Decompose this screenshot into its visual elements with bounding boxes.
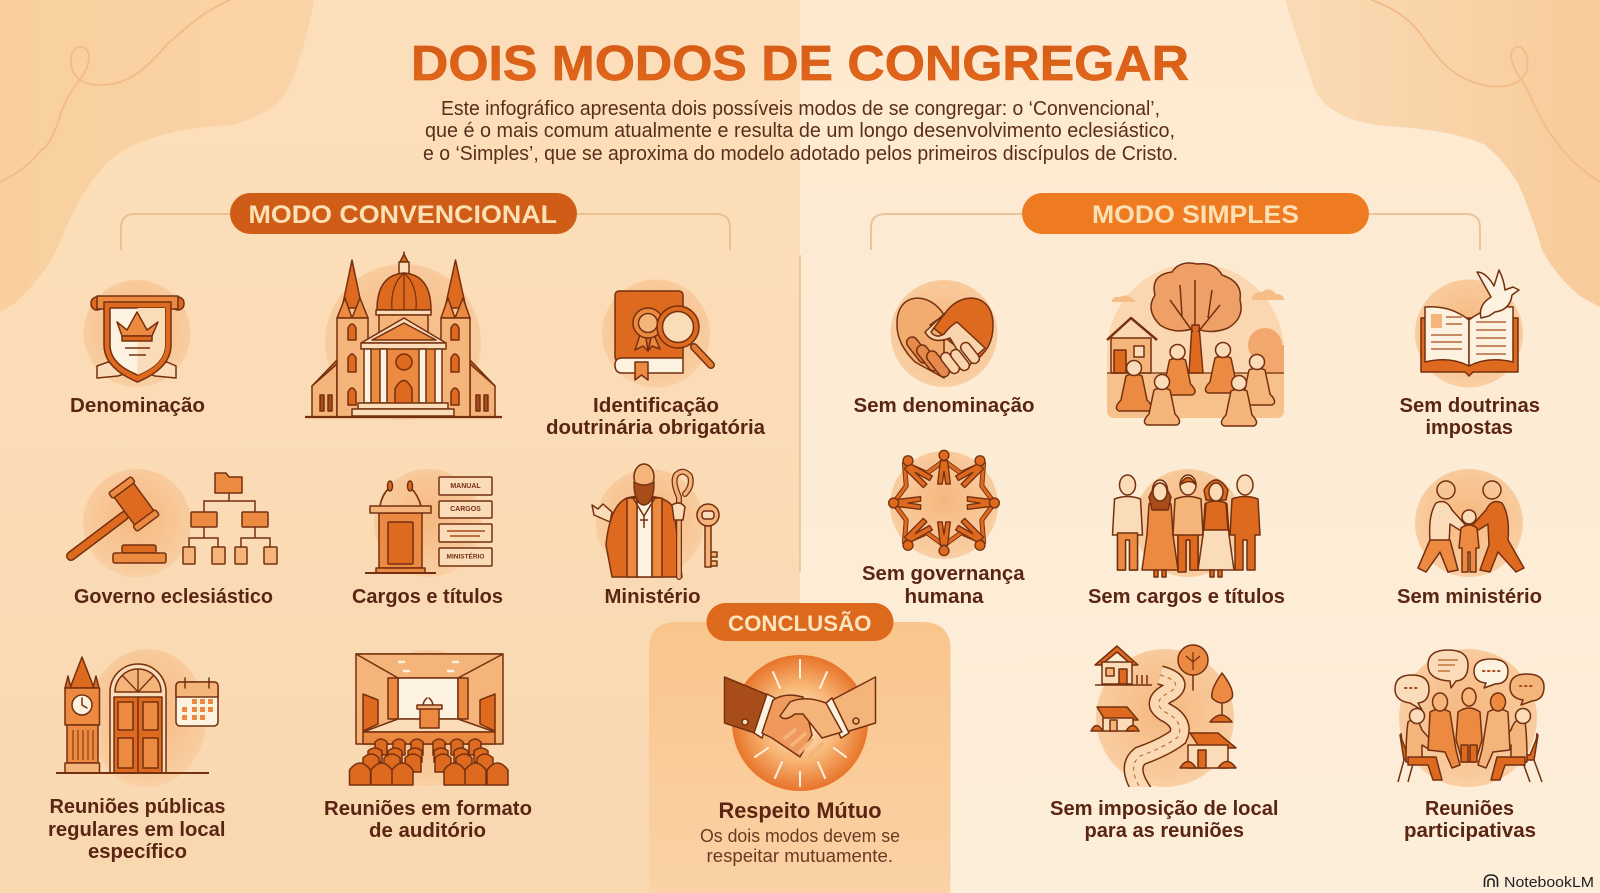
label: Cargos e títulos	[352, 586, 503, 608]
conclusion text: Os dois modos devem se	[700, 826, 900, 846]
label	[48, 796, 226, 863]
conclusion text	[700, 826, 900, 866]
intro paragraph: e o ‘Simples’, que se aproxima do modelo adotado pelos primeiros discípulos de Cristo.	[423, 143, 1178, 165]
conclusion pill: CONCLUSÃO	[728, 611, 872, 636]
item: identificacao	[546, 280, 766, 439]
intro paragraph	[423, 98, 1178, 165]
item: sem governanca	[862, 450, 1025, 608]
center divider	[799, 255, 801, 572]
item: reunioes participativas	[1395, 649, 1544, 842]
label: impostas	[1426, 417, 1513, 439]
label: de auditório	[369, 820, 486, 842]
conclusion text: respeitar mutuamente.	[706, 846, 893, 866]
label	[324, 798, 532, 842]
item: reunioes publicas	[48, 649, 226, 863]
item: cargos e titulos	[352, 469, 503, 608]
notebooklm watermark: NotebookLM	[1504, 874, 1594, 891]
heading pill: modo simples	[1022, 193, 1369, 234]
label	[862, 563, 1025, 608]
item: ministerio	[592, 464, 719, 608]
squiggle right	[1371, 0, 1600, 182]
label: Sem cargos e títulos	[1088, 586, 1285, 608]
icon: group under a tree	[1107, 263, 1284, 426]
label	[1400, 395, 1540, 439]
item: reunioes em auditorio	[324, 650, 532, 842]
background left half	[0, 0, 800, 893]
item: sem ministerio	[1397, 469, 1542, 608]
label: humana	[904, 586, 984, 608]
conclusion heading: Respeito Mútuo	[718, 798, 882, 823]
squiggle left	[0, 0, 230, 182]
icon: lectern and title plates: MINISTÉRIO	[447, 552, 484, 560]
heading pill: modo convencional	[230, 193, 577, 234]
heading pill: modo convencional: MODO CONVENCIONAL	[248, 201, 557, 229]
panel: conclusao	[649, 603, 950, 893]
icon: seated group with speech bubbles	[1395, 649, 1544, 787]
label: Reuniões	[1425, 798, 1514, 820]
icon: lectern and title plates	[365, 469, 492, 577]
conclusion pill	[706, 603, 894, 641]
icon: gavel and org chart	[71, 469, 277, 577]
icon: book and magnifier	[602, 280, 711, 388]
label	[546, 395, 766, 439]
icon: lectern and title plates: CARGOS	[450, 506, 481, 513]
label: Sem governança	[862, 563, 1025, 585]
decorative corner blob right	[1285, 0, 1600, 307]
icon: open book and dove	[1415, 270, 1523, 388]
label: específico	[88, 841, 187, 863]
icon: auditorium	[350, 650, 508, 786]
icon: clock tower door and calendar	[56, 649, 218, 787]
icon: ring of people	[889, 450, 999, 559]
icon: cathedral	[305, 252, 502, 420]
label: Sem ministério	[1397, 586, 1542, 608]
icon: road with houses	[1091, 645, 1236, 795]
icon: minister with staff and key	[592, 464, 719, 577]
label: Sem denominação	[854, 395, 1034, 417]
bracket left	[121, 214, 730, 250]
title: DOIS MODOS DE CONGREGAR	[411, 37, 1189, 91]
label: Denominação	[70, 395, 205, 417]
label	[1404, 798, 1536, 842]
background right half	[800, 0, 1600, 893]
item: denominacao	[70, 280, 205, 417]
decorative corner blob left	[0, 0, 314, 312]
icon: five people	[1112, 469, 1260, 577]
label: Ministério	[604, 586, 700, 608]
intro paragraph: que é o mais comum atualmente e resulta de um longo desenvolvimento eclesiástico,	[425, 120, 1175, 142]
item: sem cargos	[1088, 469, 1285, 608]
label: Sem doutrinas	[1400, 395, 1540, 417]
item: governo eclesiastico	[71, 469, 277, 608]
label	[1050, 798, 1278, 842]
bracket right	[871, 214, 1480, 250]
label: doutrinária obrigatória	[546, 417, 766, 439]
icon: shield with crown	[84, 280, 190, 387]
item: sem doutrinas	[1400, 270, 1540, 439]
label: Identificação	[593, 395, 719, 417]
icon: heart handshake	[890, 280, 998, 387]
heading pill: modo simples: MODO SIMPLES	[1092, 201, 1299, 229]
label: Sem imposição de local	[1050, 798, 1278, 820]
icon: lectern and title plates: MANUAL	[450, 483, 481, 490]
item: sem denominacao	[854, 280, 1034, 417]
label: participativas	[1404, 820, 1536, 842]
label: Reuniões em formato	[324, 798, 532, 820]
label: regulares em local	[48, 819, 226, 841]
intro paragraph: Este infográfico apresenta dois possíveis modos de se congregar: o ‘Convencional’,	[441, 98, 1160, 120]
label: Reuniões públicas	[50, 796, 226, 818]
item: sem imposicao de local	[1050, 645, 1278, 842]
icon: handshake in sun	[724, 655, 876, 791]
label: Governo eclesiástico	[74, 586, 273, 608]
label: para as reuniões	[1084, 820, 1244, 842]
icon: adults helping a child	[1415, 469, 1524, 577]
